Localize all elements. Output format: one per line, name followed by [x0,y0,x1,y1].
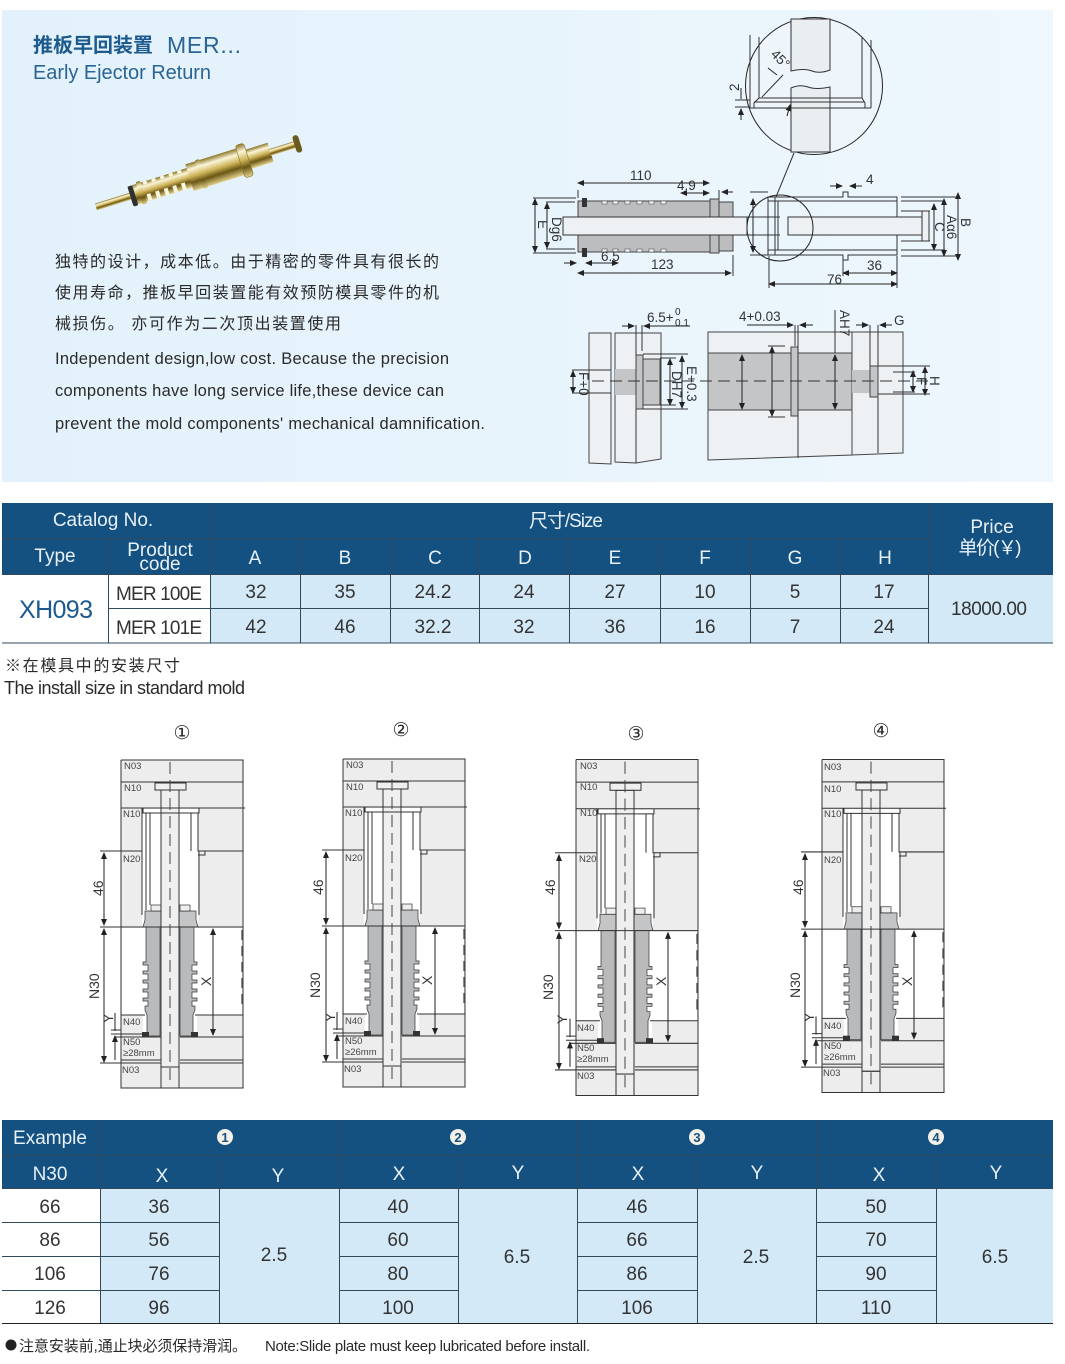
chart: installation section drawings: DH7 [669,371,684,398]
table data rows: 36 [148,1197,170,1218]
diagram 2: 46 [310,879,326,895]
title: Chinese and model name [33,32,241,58]
table header: Price [970,517,1014,538]
table data rows: 96 [148,1298,170,1319]
icon: brass ejector return part photo [91,127,305,223]
diagram 3: N20 [579,854,596,865]
diagram 1: ① [173,722,191,744]
diagram 4: X [899,976,915,986]
diagram 2: N40 [345,1016,362,1027]
diagram 2: N10 [345,808,362,819]
text block: Chinese description: 使用寿命，推板早回装置能有效预防模具零件的机 [55,284,439,302]
table data rows: 7 [790,617,800,638]
chart: dimensioned part drawing with detail circle: 36 [867,258,882,273]
table header: 2 [454,1130,462,1145]
diagram 3: N30 [540,974,556,1000]
diagram 2: N30 [307,972,323,998]
diagram 3: N40 [577,1023,594,1034]
table data rows: 110 [861,1298,891,1319]
diagram 1: N10 [123,809,140,820]
diagram 4: N03 [823,1068,840,1079]
diagram 3: N50 [577,1043,594,1054]
table header: E [609,548,621,569]
diagram 4: N03 [824,762,841,773]
table data rows: 6.5 [982,1247,1008,1268]
chart: dimensioned part drawing with detail circle: C [932,222,947,232]
diagram 3: N10 [580,808,597,819]
diagram 1: 46 [90,880,106,896]
text block: English description: prevent the mold components' mechanical damnification. [55,415,485,433]
table: example installation values [2,1120,1053,1324]
chart: installation section drawings: 0.1 [675,318,689,329]
table data rows: 18000.00 [951,599,1027,620]
table data rows: 17 [873,582,895,603]
table header: Y [751,1163,764,1184]
table data rows: 46 [626,1197,648,1218]
table data rows: 35 [334,582,356,603]
diagram 3: 46 [542,879,558,895]
heading: install size in standard mold: The install size in standard mold [4,678,245,698]
chart: dimensioned part drawing with detail circle: 45° [768,47,793,72]
chart: dimensioned part drawing with detail circle: 4 [866,172,874,187]
diagram 4: Y [801,1012,817,1022]
table data rows: 5 [790,582,800,603]
table data rows: 36 [604,617,626,638]
diagram 1: N03 [122,1065,139,1076]
table data rows: 24 [513,582,535,603]
diagram 4: 46 [790,879,806,895]
table header: N30 [33,1164,67,1185]
diagram 2: ② [392,719,410,741]
chart: dimensioned part drawing with detail circle [533,18,973,288]
diagram 3: X [653,976,669,986]
table header: 单价(￥) [958,537,1022,559]
table header [13,1128,1003,1187]
panel: product introduction [2,10,1053,482]
text block: Chinese description [55,253,439,333]
table header: Example [13,1128,87,1149]
diagram 2: N10 [346,782,363,793]
table data rows: 56 [148,1230,170,1251]
diagram 3: ③ [627,723,645,745]
text block: Chinese description: 械损伤。 亦可作为二次顶出装置使用 [55,315,341,333]
table header: 4 [932,1130,940,1145]
diagram 1: Y [100,1013,116,1023]
diagram 3: Y [554,1014,570,1024]
chart: dimensioned part drawing with detail circle: E [535,220,550,229]
table data rows [34,1197,1008,1319]
chart: installation section drawings: E+0.3 [684,366,699,402]
chart: dimensioned part drawing with detail circle: 76 [827,272,842,287]
table data rows: 10 [694,582,716,603]
chart: installation section drawings: 4+0.03 [739,309,781,324]
table header: Y [272,1166,285,1187]
table data rows: 76 [148,1264,170,1285]
table data rows: 32 [513,617,535,638]
table header: A [249,548,262,569]
table header: Product [127,540,193,561]
table header: Y [512,1163,525,1184]
diagram 1: ≥28mm [123,1048,155,1059]
diagram 4 [787,720,946,1093]
table data rows: 6.5 [504,1247,530,1268]
table header: Catalog No. [53,510,153,531]
table data rows: 80 [387,1264,409,1285]
diagram 2: X [419,975,435,985]
table data rows [19,582,1027,639]
table data rows: 86 [626,1264,648,1285]
table data rows: 16 [694,617,716,638]
table data rows: 60 [387,1230,409,1251]
diagram 1: X [198,976,214,986]
table data rows: 40 [387,1197,409,1218]
text block: English description: components have long service life,these device can [55,382,444,400]
title: Chinese and model name: MER... [167,32,241,58]
table data rows: 24 [873,617,895,638]
text block: English description: Independent design,low cost. Because the precision [55,350,449,368]
diagram 2: Y [322,1012,338,1022]
heading: install size in standard mold [4,657,245,698]
table data rows: 106 [34,1264,66,1285]
chart: installation section drawings: H [927,376,942,386]
chart: installation section drawings: F+0 [576,372,591,396]
chart: installation section drawings: F [914,377,929,385]
table data rows: 27 [604,582,626,603]
diagram 2: N20 [345,853,362,864]
chart: dimensioned part drawing with detail circle: B [958,218,973,227]
table data rows: 90 [865,1264,887,1285]
table data rows: 70 [865,1230,887,1251]
diagram 2: N50 [345,1036,362,1047]
table data rows: 66 [626,1230,648,1251]
chart: dimensioned part drawing with detail circle: Aα6 [944,215,959,239]
table data rows: 2.5 [743,1247,769,1268]
table data rows: 100 [382,1298,414,1319]
table data rows: MER 101E [116,618,202,639]
chart: dimensioned part drawing with detail circle: 123 [651,257,674,272]
diagram 4: N10 [824,784,841,795]
table data rows: 126 [34,1298,66,1319]
table data rows: 2.5 [261,1245,287,1266]
table data rows: 32 [245,582,267,603]
table data rows: 42 [245,617,267,638]
table header: 1 [221,1130,229,1145]
diagram 4: N30 [787,972,803,998]
chart: dimensioned part drawing with detail circle: Dg6 [549,217,564,242]
footnote: 注意安装前,通止块必须保持滑润。 [19,1337,247,1355]
diagram 1: N10 [124,783,141,794]
table header: Type [34,546,76,567]
table data rows: 46 [334,617,356,638]
diagram 3: ≥28mm [577,1054,609,1065]
chart: installation section drawings [572,307,942,464]
diagram 4: N10 [824,809,841,820]
table header: 3 [693,1130,701,1145]
chart: installation section drawings: 0 [675,307,681,318]
table header: X [632,1164,645,1185]
diagram 3 [540,723,700,1096]
text block: English description [55,350,485,433]
diagram 4: N40 [824,1021,841,1032]
table data rows: 50 [865,1197,887,1218]
diagram 2 [307,719,467,1087]
table header: F [699,548,711,569]
diagram 4: ≥26mm [824,1052,856,1063]
diagram 3: N10 [580,782,597,793]
diagram 3: N03 [577,1071,594,1082]
diagram 1 [86,722,245,1088]
chart: dimensioned part drawing with detail circle: 6.5 [601,249,620,264]
table header: D [518,548,532,569]
table header: B [339,548,351,569]
heading: install size in standard mold: ※在模具中的安装尺寸 [5,657,180,675]
table header: Y [990,1163,1003,1184]
diagram 2: N03 [344,1064,361,1075]
diagram 4: N20 [824,855,841,866]
diagram 2: ≥26mm [345,1047,377,1058]
diagram 3: N03 [580,761,597,772]
table header: G [788,548,802,569]
table header: X [393,1164,406,1185]
table header: H [878,548,892,569]
diagram 4: ④ [872,720,890,742]
diagram 2: N03 [346,760,363,771]
table header: X [156,1166,169,1187]
table data rows: 24.2 [415,582,451,603]
chart: dimensioned part drawing with detail circle: 4.9 [677,178,696,193]
diagram 1: N03 [124,761,141,772]
chart: dimensioned part drawing with detail circle: 110 [630,168,652,183]
footnote: Note:Slide plate must keep lubricated before install. [265,1338,590,1355]
diagram 1: N20 [123,854,140,865]
title: Chinese and model name: 推板早回装置 [33,34,153,57]
chart: installation section drawings: 6.5+ [647,310,674,325]
table data rows: 32.2 [415,617,451,638]
chart: installation section drawings: G [894,313,905,328]
table header [34,510,1022,575]
text block: Chinese description: 独特的设计，成本低。由于精密的零件具有很长的 [55,253,439,271]
diagram 1: N50 [123,1037,140,1048]
table data rows: 106 [621,1298,653,1319]
table data rows: 66 [39,1197,61,1218]
chart: dimensioned part drawing with detail circle: 2 [727,83,742,91]
diagram 1: N40 [123,1017,140,1028]
table header: X [873,1165,886,1186]
table: catalog sizes and price [2,503,1053,643]
table data rows: 86 [39,1230,61,1251]
diagram 1: N30 [86,973,102,999]
subtitle: Early Ejector Return [33,62,211,84]
footnote [6,1337,590,1355]
diagram 4: N50 [824,1041,841,1052]
table data rows: XH093 [19,596,93,624]
table header: C [428,548,442,569]
chart: installation section drawings: AH7 [837,310,852,336]
table data rows: MER 100E [116,584,202,605]
table header: 尺寸/Size [529,510,603,532]
table header: code [139,554,181,575]
